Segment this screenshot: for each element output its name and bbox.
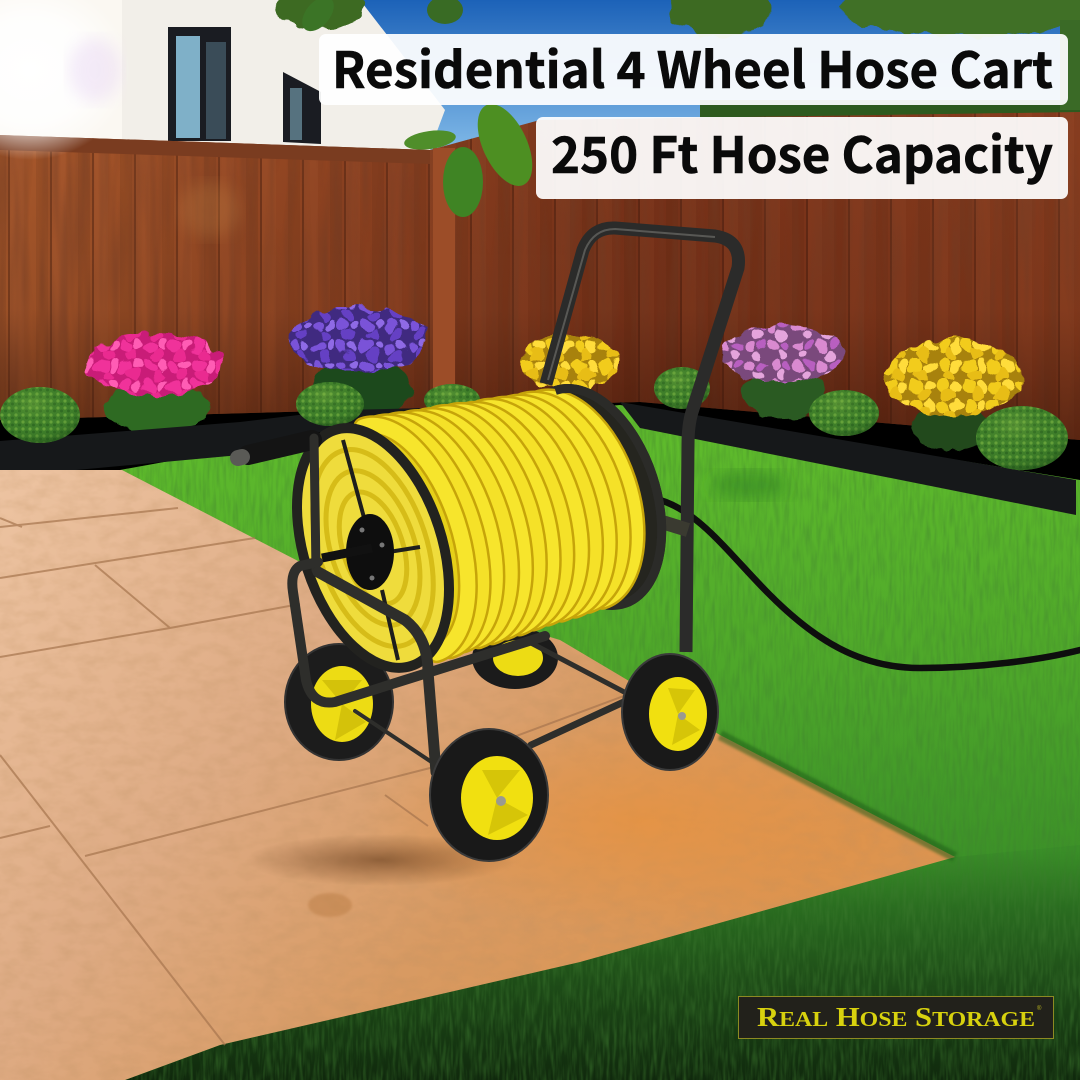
- back ring front edge: [555, 370, 687, 604]
- flower bed: yellow flowers right: [885, 339, 1021, 450]
- foreground dark grass: [125, 845, 1080, 1080]
- logo: Real Hose Storage: ®: [1037, 1005, 1042, 1012]
- back wheel: [472, 627, 558, 689]
- flower bed: lilac flowers: [722, 325, 842, 420]
- background: house wall and windows: [0, 0, 445, 150]
- frame and push bar: [238, 438, 628, 772]
- logo: Real Hose Storage: REAL HOSE STORAGE: [757, 1002, 1035, 1032]
- flower bed: purple flowers: [285, 307, 429, 416]
- hanging leaves: [296, 0, 544, 217]
- left wheel: [285, 644, 393, 760]
- planter edging: [0, 402, 1076, 515]
- back reel ring: [493, 370, 687, 624]
- background: sky: [0, 0, 1080, 170]
- yellow hose coils: [340, 382, 660, 660]
- shrubs: [0, 367, 1068, 470]
- flower bed: yellow flowers behind cart: [521, 334, 619, 390]
- right front wheel: [622, 654, 718, 770]
- black garden hose trailing to the right: [660, 500, 1080, 668]
- subtitle label: 250 Ft Hose Capacity: 250 Ft Hose Capacity: [551, 116, 1053, 188]
- handle frame: [546, 228, 739, 652]
- near front wheel: [430, 729, 548, 861]
- logo: Real Hose Storage: [738, 996, 1054, 1038]
- lawn edge shadow: [720, 735, 955, 857]
- lawn: [120, 405, 1080, 1080]
- front reel flange with wound hose: [269, 409, 477, 687]
- flower bed: pink flowers: [87, 333, 223, 433]
- background: tree foliage top right: [274, 0, 1080, 124]
- title label: Residential 4 Wheel Hose Cart: Residential 4 Wheel Hose Cart: [332, 31, 1053, 103]
- wooden fence: [0, 112, 1080, 442]
- lens flare: [0, 0, 240, 238]
- stone patio: [0, 470, 955, 1080]
- hose cart: [238, 228, 739, 861]
